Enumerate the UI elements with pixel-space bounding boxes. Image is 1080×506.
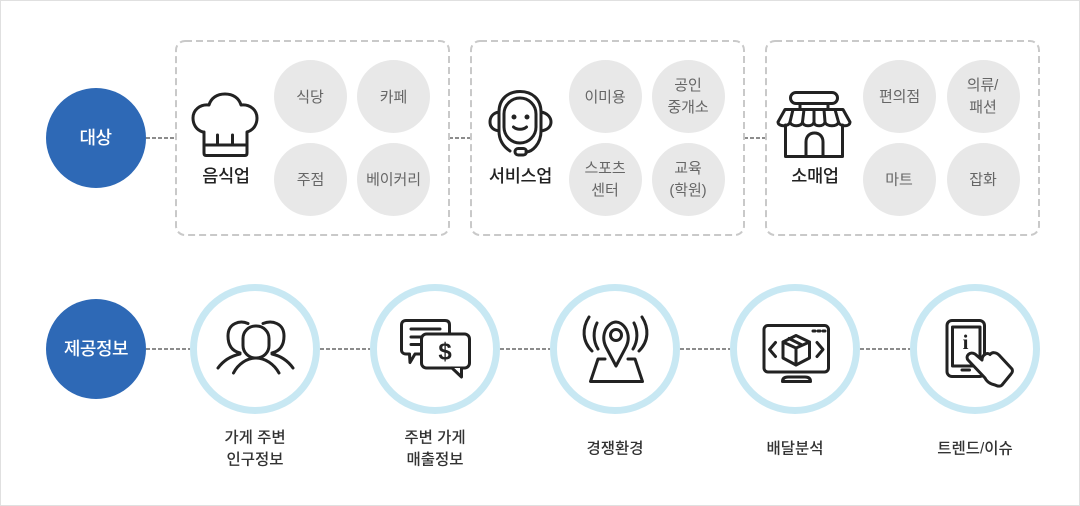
chip: education: 교육 <box>674 160 702 177</box>
chip: bakery: 베이커리 <box>366 172 421 188</box>
icon: map pin with signal <box>584 317 647 382</box>
chip: mart <box>863 143 936 216</box>
chip: fashion: 의류/ <box>967 77 999 94</box>
panel: services <box>471 41 744 235</box>
chip: restaurant <box>274 60 347 133</box>
chip: goods: 잡화 <box>969 172 997 188</box>
heading: provided information: 제공정보 <box>64 339 128 359</box>
chip: restaurant: 식당 <box>296 89 324 106</box>
item: sales info <box>374 288 496 468</box>
icon: speech bubbles with dollar <box>402 320 470 377</box>
chip: education: (학원) <box>669 182 707 199</box>
chip: cafe: 카페 <box>380 89 407 106</box>
heading: target: 대상 <box>79 128 112 148</box>
chip: real estate: 공인 <box>674 77 702 94</box>
chip: mart: 마트 <box>885 172 913 188</box>
icon: headset agent <box>490 92 551 155</box>
label: trends: 트렌드/이슈 <box>937 440 1013 458</box>
label: sales <box>404 428 466 468</box>
chip: sports center: 센터 <box>591 182 619 199</box>
chip: fashion <box>947 60 1020 133</box>
chip: bakery <box>357 143 430 216</box>
chip: real estate: 중개소 <box>667 99 709 116</box>
chip: convenience store: 편의점 <box>879 88 920 106</box>
heading: target <box>46 88 146 188</box>
label: food service: 음식업 <box>202 166 250 186</box>
icon: storefront <box>778 92 850 156</box>
chip: beauty <box>569 60 642 133</box>
item: trends <box>914 288 1036 458</box>
chip: education <box>652 143 725 216</box>
label: population: 가게 주변 <box>224 428 286 446</box>
label: population <box>224 428 286 468</box>
icon: dollar sign: $ <box>438 338 452 366</box>
panel: retail <box>766 41 1039 235</box>
chip: fashion: 패션 <box>969 99 997 116</box>
label: retail: 소매업 <box>791 166 839 186</box>
chip: pub: 주점 <box>297 172 324 188</box>
chip: real estate <box>652 60 725 133</box>
heading: provided information <box>46 299 146 399</box>
chip: sports center <box>569 143 642 216</box>
panel: food service <box>176 41 449 235</box>
label: competition: 경쟁환경 <box>586 440 644 458</box>
chip: sports center: 스포츠 <box>584 160 626 177</box>
chip: cafe <box>357 60 430 133</box>
icon: info mark: i <box>963 330 969 354</box>
icon: phone with tapping hand <box>947 320 1012 386</box>
chip: pub <box>274 143 347 216</box>
icon: chef hat <box>193 94 257 156</box>
label: sales: 매출정보 <box>406 450 464 468</box>
chip: goods <box>947 143 1020 216</box>
label: population: 인구정보 <box>226 450 284 468</box>
icon: people <box>218 322 293 373</box>
item: population info <box>194 288 316 468</box>
label: delivery analysis: 배달분석 <box>766 440 824 458</box>
chip: convenience store <box>863 60 936 133</box>
label: sales: 주변 가게 <box>404 428 466 446</box>
icon: monitor with parcel <box>764 326 828 382</box>
label: services: 서비스업 <box>489 166 552 186</box>
chip: beauty: 이미용 <box>584 89 626 106</box>
item: delivery analysis <box>734 288 856 458</box>
item: competition <box>554 288 676 458</box>
